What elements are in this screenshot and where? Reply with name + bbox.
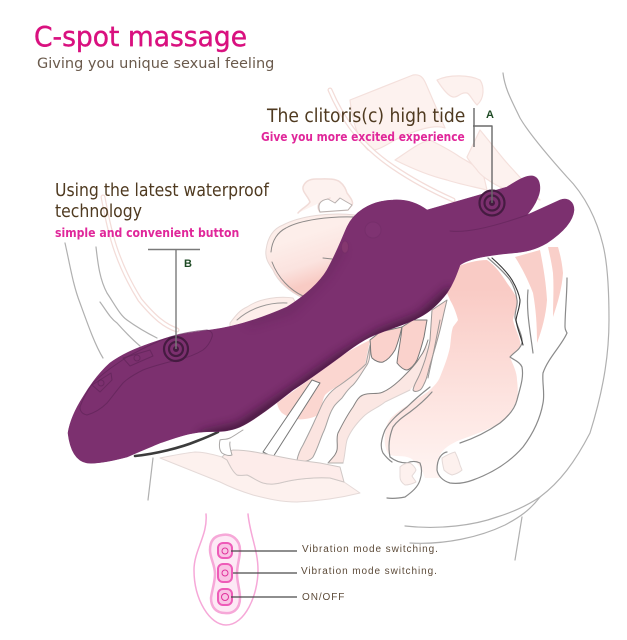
narrow pink loop xyxy=(413,300,447,392)
callout A heading: The clitoris(c) high tide xyxy=(267,106,465,127)
lower round organ xyxy=(230,297,300,330)
grey contours xyxy=(381,258,567,498)
lower organs xyxy=(160,452,360,502)
callout B heading xyxy=(55,181,270,222)
subtitle: Giving you unique sexual feeling xyxy=(37,56,274,72)
diagram: anatomical cross-section xyxy=(65,73,609,560)
callout A subtext: Give you more excited experience xyxy=(261,130,465,144)
button 2 xyxy=(218,564,232,582)
remote label 1: Vibration mode switching. xyxy=(302,544,439,555)
white double line xyxy=(263,380,320,457)
callout B heading: technology xyxy=(55,202,142,222)
second pale band xyxy=(328,340,428,463)
title: C-spot massage xyxy=(34,21,247,53)
pink scallop cells xyxy=(370,327,402,362)
label A: A xyxy=(486,109,494,121)
label B: B xyxy=(184,258,192,270)
callout B heading: Using the latest waterproof xyxy=(55,181,269,201)
dark curve beneath device xyxy=(135,432,218,456)
pink slivers xyxy=(515,250,547,343)
body outline xyxy=(65,73,609,560)
remote label 2: Vibration mode switching. xyxy=(301,566,438,577)
device body xyxy=(68,176,574,463)
callout B subtext: simple and convenient button xyxy=(55,226,239,240)
leader line B xyxy=(148,249,200,349)
pale band with wiggle xyxy=(297,345,370,461)
pink oval under device xyxy=(277,340,370,419)
long pale band xyxy=(330,90,453,200)
pale upper organs xyxy=(350,75,540,200)
remote leader lines xyxy=(231,551,297,597)
bladder xyxy=(266,214,355,298)
large pink organ xyxy=(385,260,520,478)
remote control diagram xyxy=(194,514,258,625)
ear crease xyxy=(450,215,527,231)
top fold above bladder xyxy=(298,179,353,213)
button 1 xyxy=(218,543,232,558)
small hearts xyxy=(400,463,416,485)
button 3 xyxy=(218,589,232,605)
head bumps xyxy=(365,222,381,238)
leader line A xyxy=(473,108,492,203)
left pale band xyxy=(103,197,177,330)
target marker A xyxy=(480,190,504,216)
small hook xyxy=(219,430,243,455)
remote label 3: ON/OFF xyxy=(302,592,345,603)
button panel outline xyxy=(80,330,212,415)
illustration: diagram, device and callouts xyxy=(64,72,610,626)
target marker B xyxy=(164,337,188,361)
